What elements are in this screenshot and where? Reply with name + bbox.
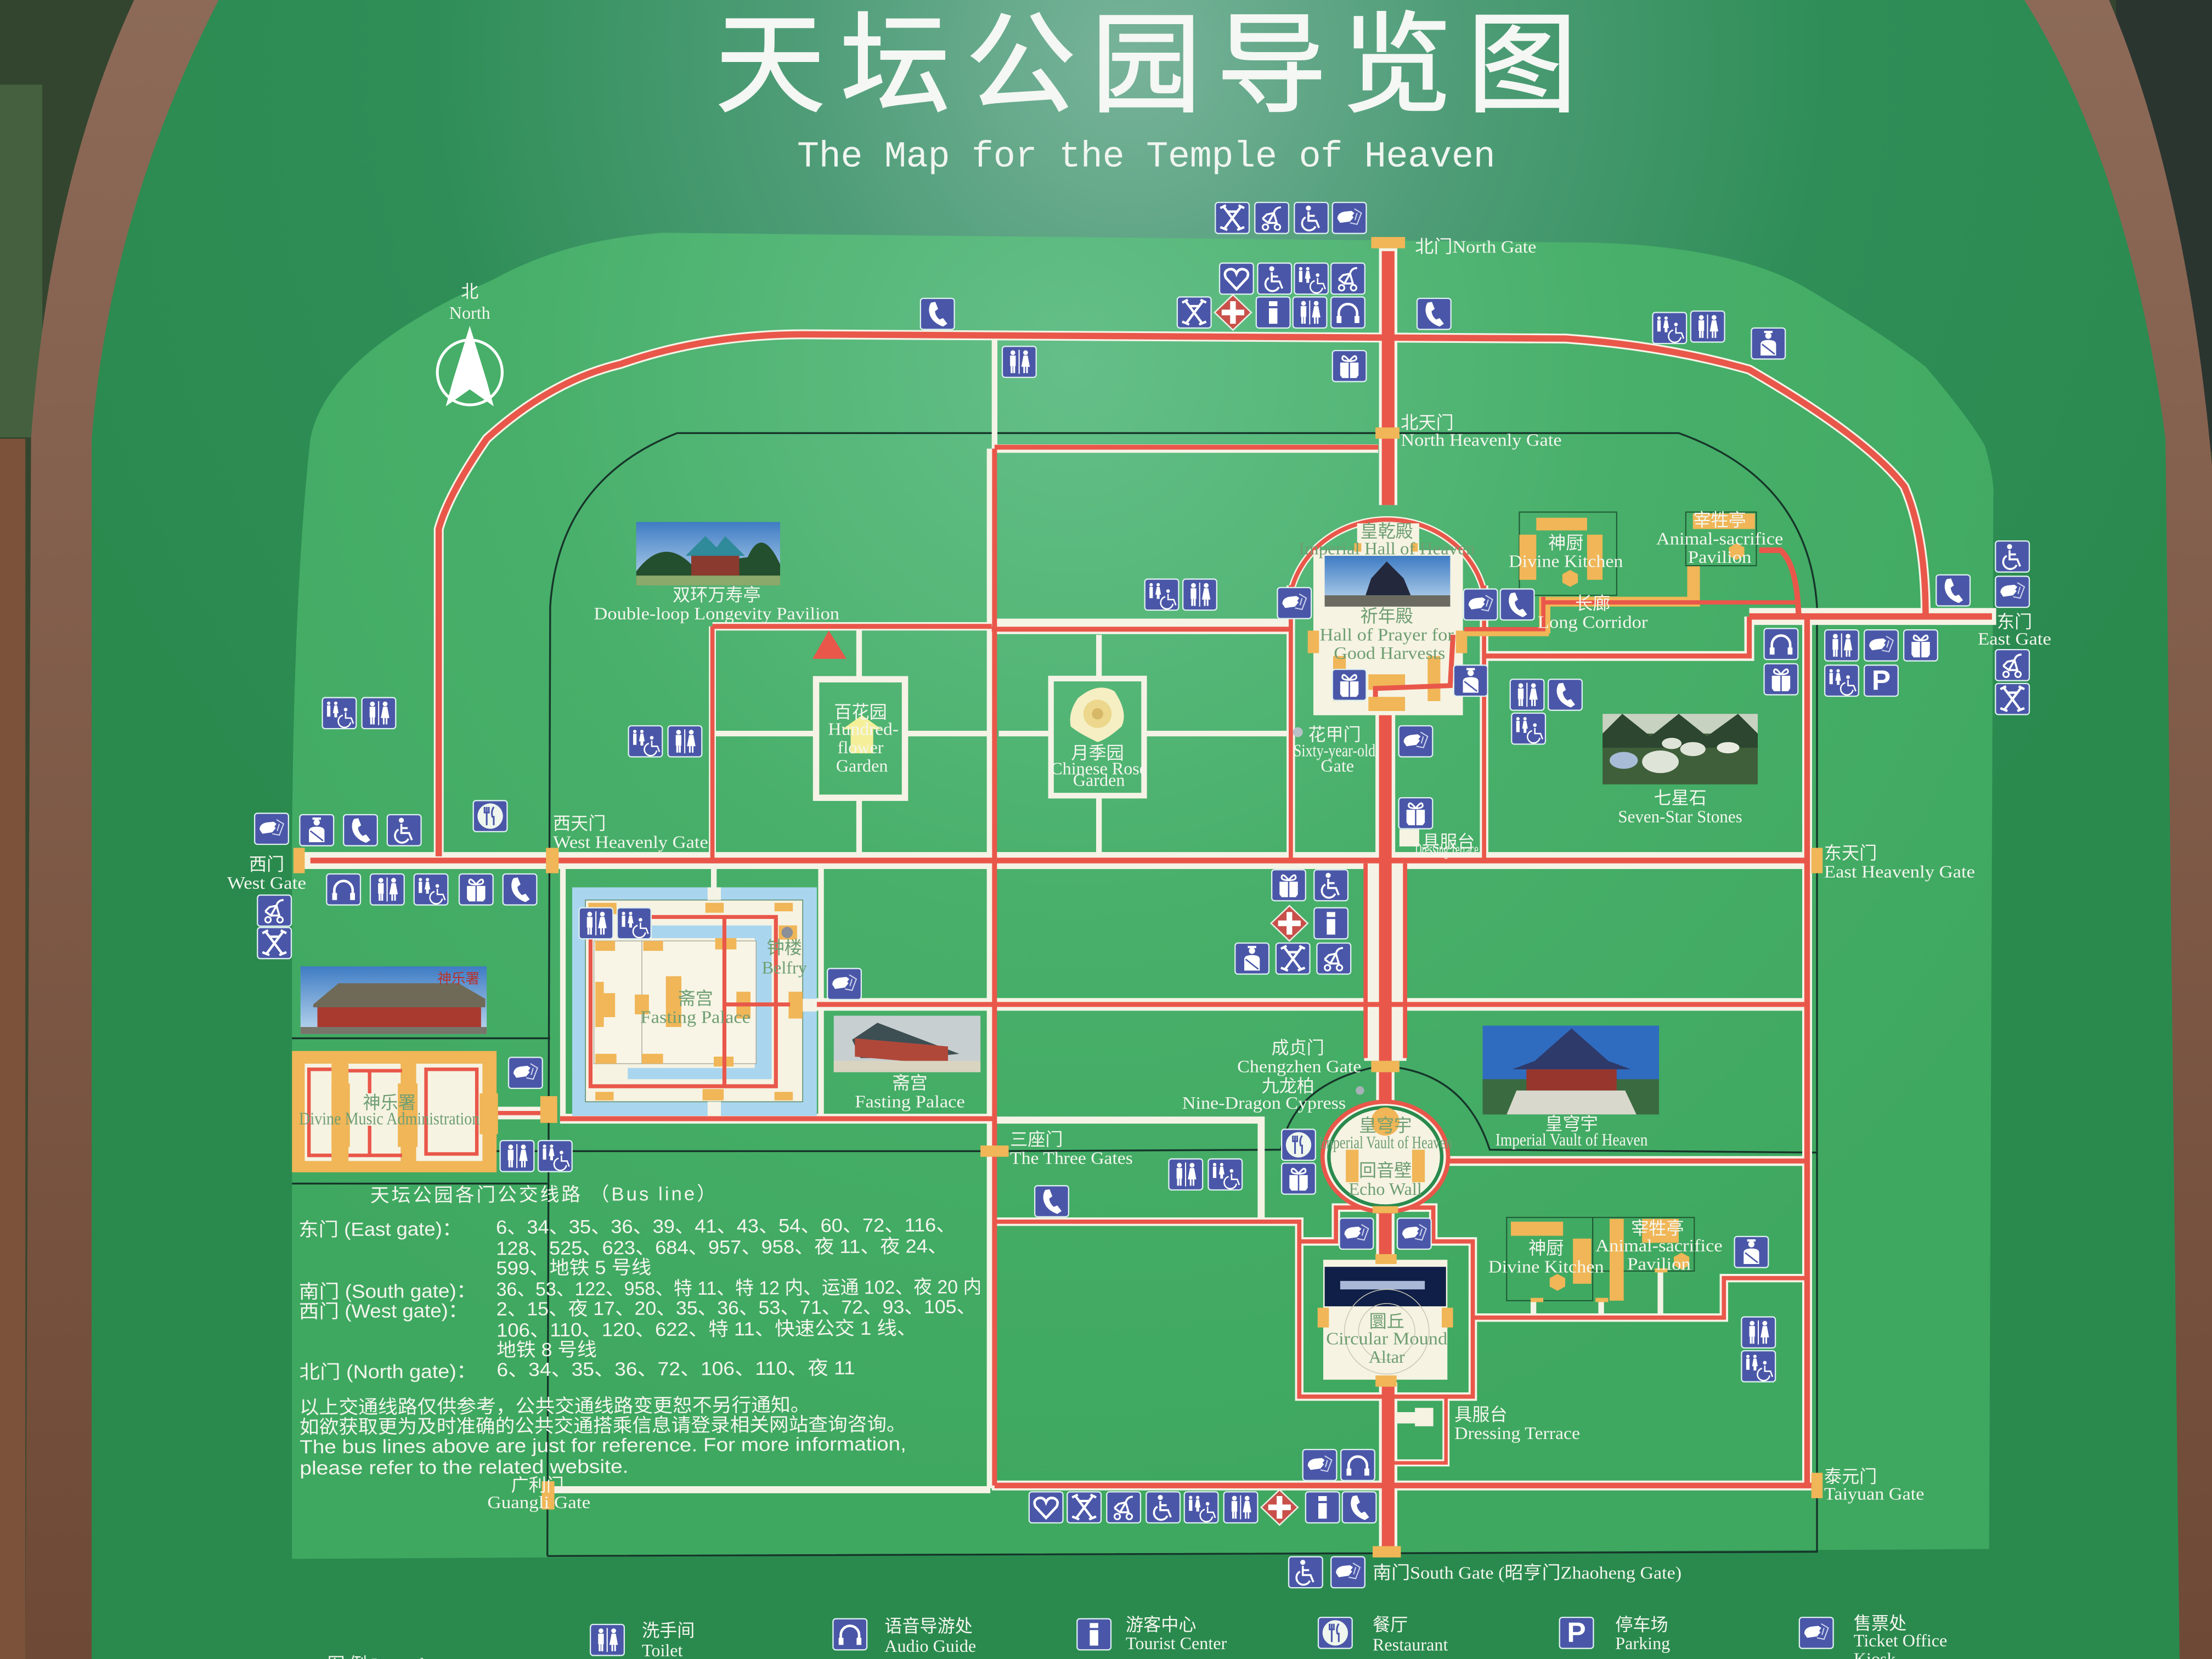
gate labels: Taiyuan Gate (1824, 1483, 1924, 1503)
hall of prayer for good harvests complex: Good Harvests (1334, 643, 1445, 663)
labels: chengzhen gate and nine-dragon cypress: 成贞门 (1272, 1038, 1324, 1058)
gate labels: 西天门 (553, 814, 606, 833)
garden: hundred-flower: Hundred- (828, 719, 899, 739)
gate labels: East Gate (1978, 629, 2051, 648)
hall of prayer for good harvests complex: 皇乾殿 (1361, 522, 1413, 541)
labels: chengzhen gate and nine-dragon cypress (1182, 1038, 1364, 1113)
bus line panel: 天坛公园各门公交线路 （Bus line） (370, 1183, 716, 1206)
legend: Audio Guide (884, 1636, 976, 1656)
north dressing terrace marker: 具服台 (1422, 832, 1475, 851)
bus line panel: 2、15、夜 17、20、35、36、53、71、72、93、105、 (496, 1296, 976, 1320)
garden: Chinese rose: Chinese Rose (1051, 759, 1147, 778)
bus line panel: 6、34、35、36、39、41、43、54、60、72、116、 (496, 1215, 956, 1238)
photo: double-loop longevity pavilion (636, 522, 780, 585)
garden: hundred-flower: flower (838, 737, 884, 757)
bus line panel: 128、525、623、684、957、958、夜 11、夜 24、 (496, 1235, 947, 1259)
title: 天坛公园导览图 (715, 3, 1577, 127)
compass: north: 北 (461, 282, 478, 302)
bus line panel: 如欲获取更为及时准确的公共交通搭乘信息请登录相关网站查询咨询。 (300, 1413, 906, 1438)
dressing terrace south (1395, 1404, 1580, 1443)
north corridor and divine kitchen: Pavilion (1688, 547, 1751, 567)
hall of prayer for good harvests complex: 祈年殿 (1361, 606, 1413, 626)
label: seven-star stones (1618, 788, 1742, 826)
legend (328, 1613, 1947, 1659)
gate labels: East Heavenly Gate (1824, 861, 1975, 881)
fasting palace plan: Belfry (762, 957, 807, 977)
bus line panel: 南门 (South gate)： (299, 1280, 477, 1302)
legend: Parking (1615, 1633, 1670, 1653)
imperial vault of heaven circle: Echo Wall (1348, 1179, 1422, 1199)
legend: 餐厅 (1373, 1615, 1408, 1635)
legend: Ticket Office (1854, 1630, 1947, 1650)
label: sixty-year-old gate: Sixty-year-old (1294, 740, 1375, 760)
north corridor and divine kitchen: 宰牲亭 (1693, 510, 1746, 530)
bus line panel: 599、地铁 5 号线 (496, 1257, 651, 1279)
label: fasting palace: Fasting Palace (855, 1092, 965, 1111)
legend: 游客中心 (1126, 1615, 1196, 1635)
bus line panel: The bus lines above are just for reference. For more information, (300, 1434, 906, 1458)
north corridor and divine kitchen: 长廊 (1575, 594, 1610, 613)
label: double-loop longevity pavilion: 双环万寿亭 (673, 585, 761, 605)
hall of prayer for good harvests complex: Imperial Hall of Heaven (1299, 539, 1475, 558)
hall of prayer for good harvests complex (1299, 522, 1475, 715)
garden: hundred-flower: 百花园 (834, 702, 887, 722)
garden: Chinese rose (1051, 679, 1147, 795)
gate labels: 泰元门 (1824, 1467, 1877, 1487)
gate labels: The Three Gates (1010, 1148, 1133, 1167)
gate labels: 东门 (1997, 612, 2032, 631)
north corridor and divine kitchen: 神厨 (1548, 533, 1583, 552)
bus line panel: 西门 (West gate)： (299, 1301, 469, 1322)
north dressing terrace marker: Dressing Terrace (1415, 839, 1479, 859)
circular mound altar: Circular Mound (1326, 1329, 1447, 1348)
road network (303, 242, 1996, 1549)
label: imperial vault of heaven (1496, 1114, 1647, 1149)
subtitle: The Map for the Temple of Heaven (797, 136, 1496, 178)
south kitchens: Pavilion (1627, 1254, 1691, 1273)
photo: seven-star stones (1602, 714, 1758, 785)
legend: 语音导游处 (884, 1616, 973, 1636)
label: seven-star stones: 七星石 (1654, 788, 1707, 808)
gates (294, 237, 1822, 1558)
bus line panel: 东门 (East gate)： (298, 1218, 462, 1240)
service icons: central and east: P (1872, 664, 1891, 696)
gate labels: 南门South Gate (昭亨门Zhaoheng Gate) (1373, 1562, 1681, 1582)
gate labels: Guangli Gate (487, 1492, 590, 1512)
fasting palace plan: 斋宫 (678, 989, 713, 1008)
garden: Chinese rose: 月季园 (1071, 743, 1124, 763)
photo: divine music administration: 神乐署 (437, 970, 479, 986)
south kitchens: 神厨 (1528, 1238, 1564, 1258)
dressing terrace south: Dressing Terrace (1454, 1423, 1580, 1443)
gate labels (227, 236, 2051, 1582)
bus line panel: 地铁 8 号线 (496, 1339, 597, 1361)
fasting palace plan: 钟楼 (767, 938, 802, 957)
park boundary line (292, 433, 1817, 1556)
legend: 停车场 (1615, 1615, 1668, 1635)
photo: hall of prayer (1325, 556, 1450, 607)
label: double-loop longevity pavilion: Double-loop Longevity Pavilion (594, 603, 839, 623)
photo: divine music administration (301, 966, 487, 1034)
divine music administration plan: Divine Music Administration (299, 1108, 479, 1128)
legend: 洗手间 (642, 1621, 695, 1640)
gate labels: West Heavenly Gate (553, 832, 708, 851)
gate labels: 东天门 (1824, 843, 1877, 863)
bus line panel (298, 1182, 983, 1479)
labels: chengzhen gate and nine-dragon cypress: Nine-Dragon Cypress (1182, 1093, 1346, 1113)
label: imperial vault of heaven: 皇穹宇 (1545, 1114, 1598, 1134)
label: sixty-year-old gate (1293, 725, 1375, 776)
divine music administration plan (292, 1051, 498, 1172)
service icons: west (255, 698, 861, 1172)
bus line panel: 以上交通线路仅供参考，公共交通线路变更恕不另行通知。 (300, 1394, 810, 1418)
fasting palace plan: Fasting Palace (640, 1007, 751, 1026)
north corridor and divine kitchen (1464, 510, 1799, 636)
service icons: north gate (921, 202, 1785, 382)
south kitchens: Animal-sacrifice (1595, 1235, 1723, 1255)
gate labels: West Gate (227, 873, 306, 893)
circular mound altar: Altar (1369, 1347, 1405, 1367)
gate labels: 西门 (249, 855, 284, 874)
photo: fasting palace (834, 1015, 980, 1072)
fasting palace plan (572, 887, 817, 1116)
photo: imperial vault of heaven (1483, 1025, 1659, 1114)
bus line panel: 36、53、122、958、特 11、特 12 内、运通 102、夜 20 内 (496, 1276, 981, 1300)
gate labels: 广利门 (511, 1475, 564, 1495)
label: seven-star stones: Seven-Star Stones (1618, 806, 1742, 826)
label: sixty-year-old gate: Gate (1321, 756, 1354, 776)
divine music administration plan: 神乐署 (363, 1093, 416, 1113)
labels: chengzhen gate and nine-dragon cypress: Chengzhen Gate (1237, 1056, 1361, 1076)
label: sixty-year-old gate: 花甲门 (1308, 725, 1361, 744)
legend: Tourist Center (1126, 1633, 1227, 1653)
hall of prayer for good harvests complex: Hall of Prayer for (1320, 624, 1454, 644)
red triangle marker (812, 630, 847, 659)
label: fasting palace (855, 1073, 965, 1111)
garden: hundred-flower (816, 679, 905, 798)
compass: north: North (449, 303, 490, 323)
label: double-loop longevity pavilion (594, 585, 839, 623)
imperial vault of heaven circle (1318, 1102, 1452, 1212)
circular mound altar (1323, 1260, 1447, 1380)
legend: Restaurant (1373, 1635, 1448, 1655)
gate labels: 北门North Gate (1415, 236, 1536, 256)
imperial vault of heaven circle: 皇穹宇 (1359, 1115, 1412, 1135)
bus line panel: 106、110、120、622、特 11、快速公交 1 线、 (496, 1317, 917, 1341)
service icons: central and east (1145, 541, 2029, 829)
gate labels: 北天门 (1401, 413, 1454, 433)
imperial vault of heaven circle: Imperial Vault of Heaven (1318, 1132, 1452, 1152)
north dressing terrace marker (1400, 830, 1479, 859)
legend: P (1567, 1616, 1586, 1648)
dressing terrace south: 具服台 (1454, 1404, 1508, 1424)
label: imperial vault of heaven: Imperial Vault of Heaven (1496, 1130, 1647, 1149)
service icons: south (1029, 870, 1775, 1588)
map area (292, 233, 1994, 1559)
garden: hundred-flower: Garden (836, 756, 888, 776)
bus line panel: 6、34、35、36、72、106、110、夜 11 (496, 1357, 855, 1380)
imperial vault of heaven circle: 回音壁 (1359, 1161, 1412, 1181)
label: fasting palace: 斋宫 (892, 1073, 928, 1093)
gate labels: 三座门 (1010, 1130, 1063, 1149)
south kitchens (1488, 1217, 1723, 1302)
north corridor and divine kitchen: Long Corridor (1538, 612, 1648, 631)
south kitchens: Divine Kitchen (1488, 1256, 1604, 1276)
compass: north (437, 282, 502, 407)
garden: Chinese rose: Garden (1073, 770, 1125, 789)
circular mound altar: 圜丘 (1369, 1312, 1404, 1331)
bus line panel: please refer to the related website. (300, 1457, 629, 1479)
bus line panel: 北门 (North gate)： (299, 1361, 477, 1383)
south kitchens: 宰牲亭 (1631, 1218, 1684, 1238)
labels: chengzhen gate and nine-dragon cypress: 九龙柏 (1262, 1076, 1314, 1096)
legend: 售票处 (1854, 1613, 1906, 1633)
gate labels: North Heavenly Gate (1401, 430, 1562, 450)
north corridor and divine kitchen: Divine Kitchen (1509, 551, 1623, 571)
north corridor and divine kitchen: Animal-sacrifice (1656, 529, 1783, 549)
